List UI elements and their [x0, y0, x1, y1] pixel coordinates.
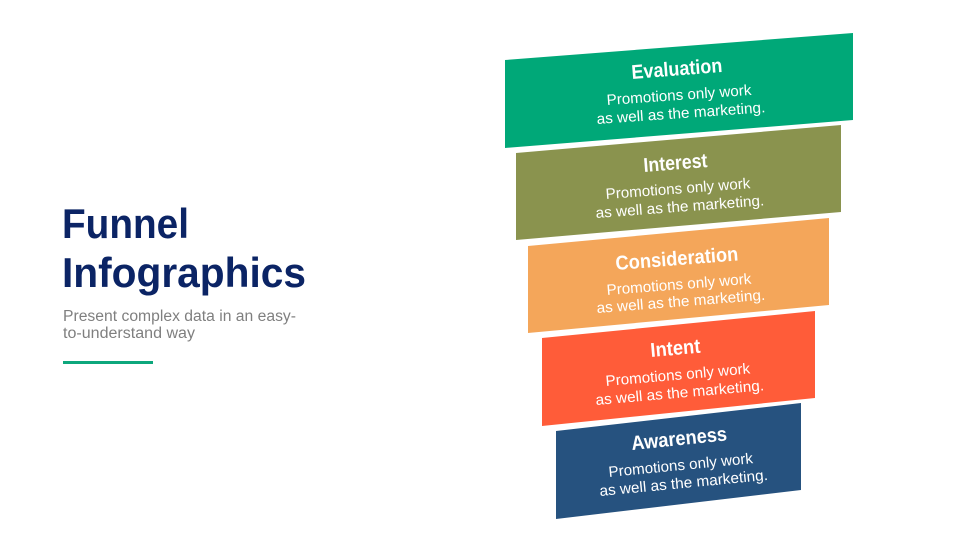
band text	[599, 450, 769, 500]
band shape	[556, 403, 801, 519]
title block	[62, 200, 306, 364]
band text: as well as the marketing.	[595, 377, 765, 409]
band text	[595, 360, 765, 409]
band: Consideration	[528, 218, 829, 333]
band shape	[542, 311, 815, 426]
band text	[595, 175, 765, 222]
accent underline	[63, 361, 153, 364]
band text: as well as the marketing.	[596, 99, 766, 128]
band text: as well as the marketing.	[599, 467, 769, 500]
subtitle: to-understand way	[63, 325, 195, 342]
band shape	[528, 218, 829, 333]
band heading: Intent	[650, 336, 702, 362]
subtitle	[63, 308, 296, 342]
band: Intent	[542, 311, 815, 426]
band: Evaluation	[505, 33, 853, 148]
band text	[596, 82, 766, 128]
band text: Promotions only work	[608, 450, 754, 481]
band: Interest	[516, 125, 841, 240]
heading: Funnel Infographics: Funnel	[62, 200, 189, 247]
subtitle: Present complex data in an easy-	[63, 308, 296, 325]
band heading: Consideration	[615, 243, 739, 275]
band text: Promotions only work	[605, 175, 751, 203]
band text: as well as the marketing.	[595, 192, 765, 222]
heading: Funnel Infographics	[62, 200, 306, 296]
band: Awareness	[556, 403, 801, 519]
band shape	[505, 33, 853, 148]
band shape	[516, 125, 841, 240]
band heading: Interest	[643, 150, 708, 177]
band text: Promotions only work	[606, 271, 752, 299]
band text: Promotions only work	[606, 82, 752, 109]
funnel	[505, 33, 853, 519]
band heading: Awareness	[630, 423, 728, 455]
band text	[596, 271, 766, 317]
band text: as well as the marketing.	[596, 287, 766, 317]
band text: Promotions only work	[605, 360, 751, 390]
band heading: Evaluation	[631, 55, 723, 84]
heading: Funnel Infographics: Infographics	[62, 249, 306, 296]
